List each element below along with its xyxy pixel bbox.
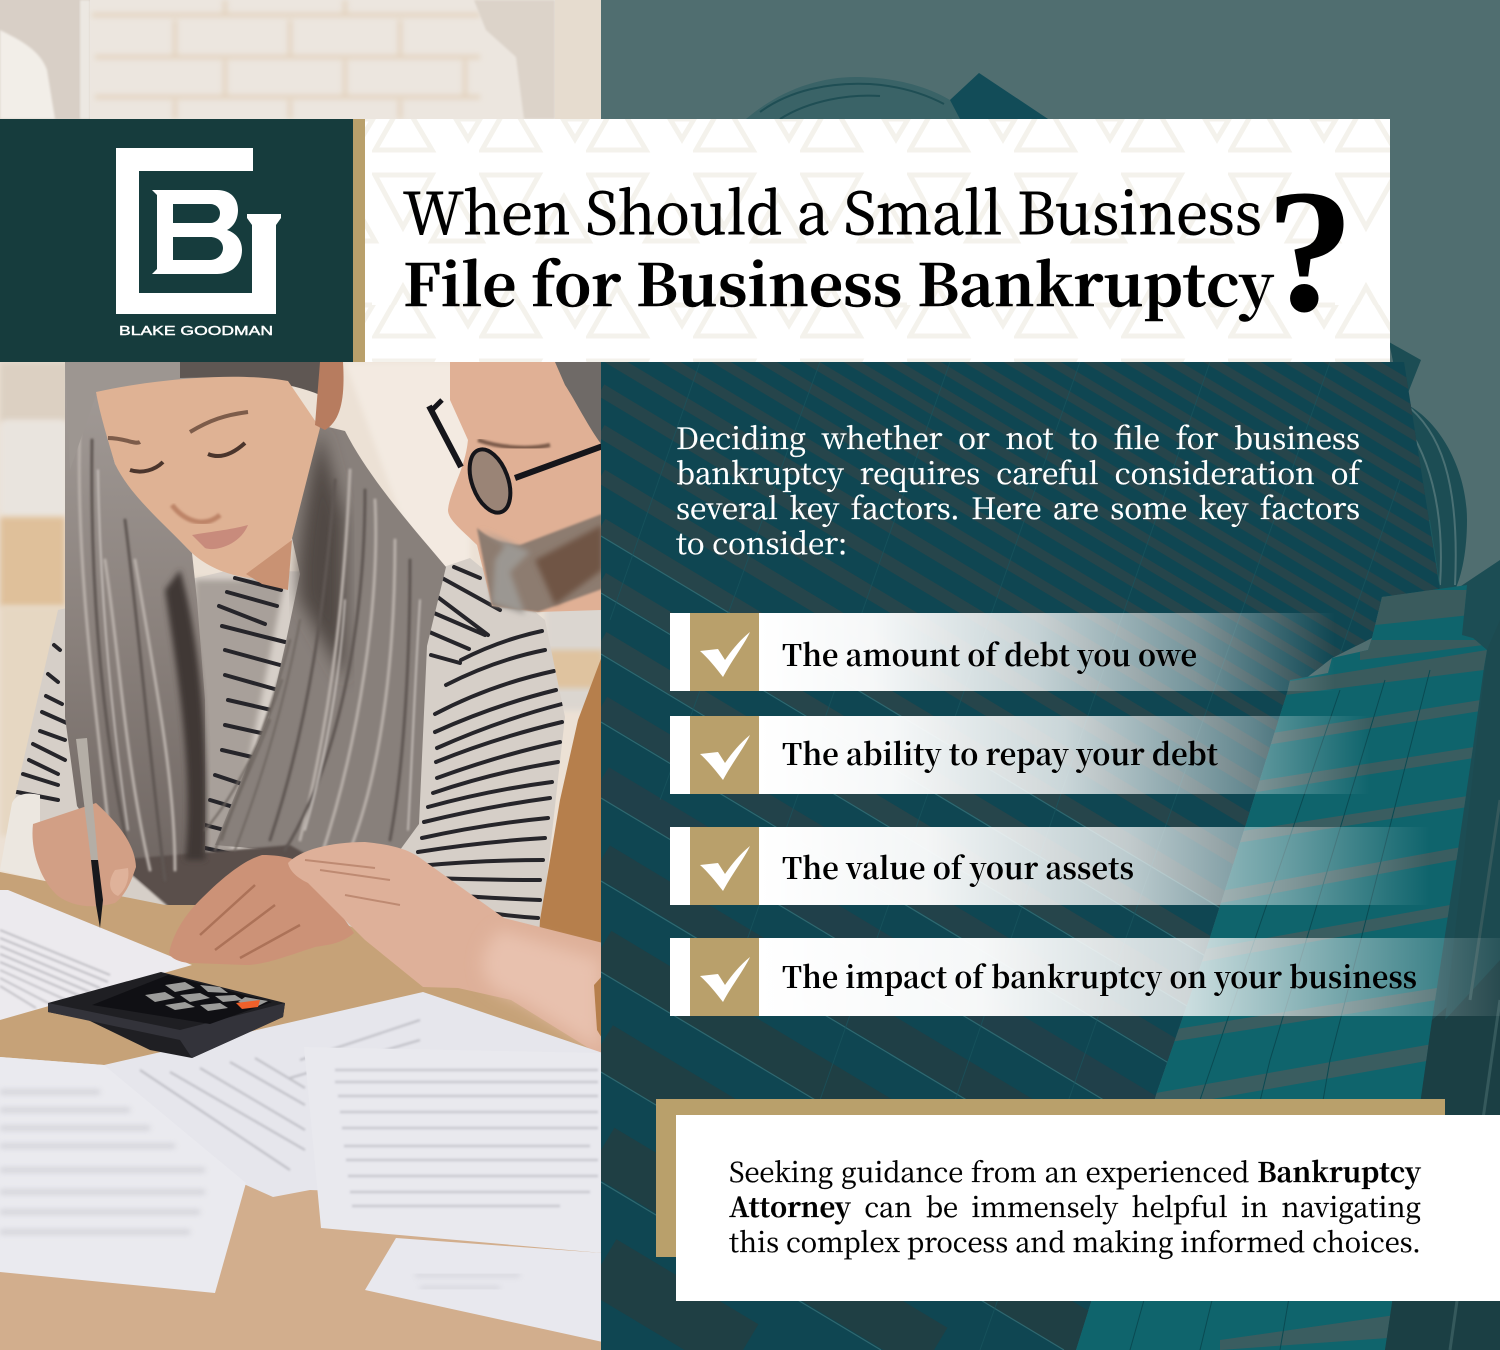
checklist row 2 — [670, 716, 1370, 794]
checklist row 3: The value of your assets — [782, 844, 1134, 888]
teal sky background — [601, 0, 1500, 1350]
paper stacks — [0, 992, 603, 1342]
checklist row 4 — [670, 938, 1500, 1016]
callout text: Attorney can be immensely helpful in navigating — [729, 1186, 1421, 1225]
lighter tower section at right — [1076, 585, 1500, 1350]
woman's face — [96, 362, 344, 590]
checklist row 2: The ability to repay your debt — [782, 730, 1218, 774]
pen — [76, 738, 128, 928]
woman's long grey hair — [65, 362, 446, 908]
header: logo panel — [0, 119, 353, 362]
large question mark: ? — [1266, 154, 1354, 349]
wall photo above the header — [0, 0, 601, 119]
document under the pen — [0, 890, 192, 1020]
calculator — [48, 972, 285, 1058]
callout text: this complex process and making informed choices. — [729, 1221, 1421, 1260]
woman's striped shirt — [0, 558, 565, 940]
intro paragraph — [676, 416, 1362, 563]
man's tan cardigan — [540, 659, 601, 942]
wooden table — [0, 872, 603, 1350]
title — [403, 167, 1274, 323]
checklist row 1: The amount of debt you owe — [782, 631, 1197, 675]
callout text: Seeking guidance from an experienced Bankruptcy — [729, 1151, 1421, 1190]
building dome silhouette — [746, 73, 1500, 1350]
gold divider — [353, 119, 365, 362]
title: File for Business Bankruptcy — [403, 239, 1274, 323]
room background — [0, 362, 605, 902]
dark glass tower with diagonal stripes — [601, 362, 1440, 1350]
man's face, beard and glasses — [429, 362, 603, 614]
intro paragraph: Deciding whether or not to file for business — [676, 416, 1360, 458]
checklist row 3 — [670, 827, 1430, 905]
intro paragraph: to consider: — [676, 521, 847, 563]
title banner — [365, 119, 1390, 362]
checklist row 1 — [670, 613, 1335, 691]
callout panel — [656, 1099, 1500, 1301]
checklist row 4: The impact of bankruptcy on your business — [782, 953, 1417, 997]
intro paragraph: bankruptcy requires careful consideration of — [676, 451, 1360, 493]
logo wordmark: BLAKE GOODMAN — [119, 324, 273, 338]
intro paragraph: several key factors. Here are some key factors — [676, 486, 1360, 528]
icon: Blake Goodman monogram — [116, 148, 281, 314]
callout text — [729, 1151, 1422, 1260]
title: When Should a Small Business — [403, 167, 1262, 251]
hands — [32, 803, 603, 1057]
photo of couple reviewing paperwork — [0, 362, 605, 1350]
